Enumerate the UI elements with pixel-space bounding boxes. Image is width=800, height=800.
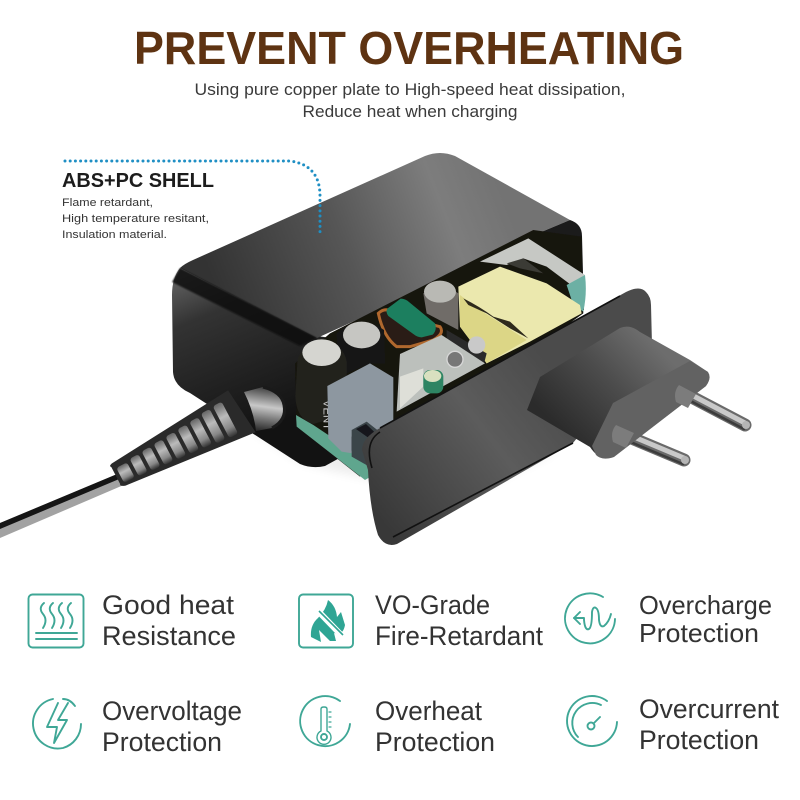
- capacitor 2: [337, 322, 385, 377]
- X capacitor block: [327, 363, 393, 453]
- feature: Good heat Resistance: Good heat: [102, 590, 235, 620]
- metal collar: [244, 387, 284, 431]
- front plate: [362, 288, 652, 545]
- title: PREVENT OVERHEATING: [134, 22, 684, 74]
- strain relief: [104, 388, 256, 499]
- feature: Overheat Protection: [300, 696, 495, 757]
- subtitle: Using pure copper plate to High-speed heat dissipation,: [194, 81, 626, 99]
- icon: crossed flame: [299, 594, 353, 648]
- callout: ABS+PC shell: ABS+PC SHELL: [62, 170, 214, 192]
- feature: Overcharge Protection: Overcharge: [639, 590, 772, 620]
- transistor: [447, 330, 487, 364]
- feature: Overheat Protection: Overheat: [375, 696, 482, 726]
- dark crease: [172, 268, 317, 346]
- circuit interior: [295, 230, 586, 480]
- callout dotted leader: [65, 161, 320, 232]
- PCB strip: [296, 415, 371, 480]
- feature: Good heat Resistance: Resistance: [102, 621, 236, 651]
- icon: heat waves: [28, 594, 84, 648]
- plug: [527, 327, 750, 464]
- plug face: [592, 361, 710, 459]
- heat sink top: [480, 238, 585, 287]
- capacitor 1: [295, 338, 347, 424]
- callout: ABS+PC shell: Insulation material.: [62, 229, 167, 241]
- interior back wall: [527, 220, 584, 320]
- feature: VO-Grade Fire-Retardant: VO-Grade: [375, 590, 490, 620]
- feature: Overvoltage Protection: Overvoltage: [102, 696, 242, 726]
- charger top surface: [180, 153, 570, 338]
- power cable: [0, 472, 126, 538]
- prong bases: [612, 385, 696, 448]
- callout: ABS+PC shell: [62, 170, 214, 241]
- copper coil: [378, 310, 441, 347]
- feature: Overvoltage Protection: Protection: [102, 727, 222, 757]
- charger product illustration: [0, 153, 750, 545]
- feature: Overcharge Protection: Protection: [639, 618, 759, 648]
- green capacitor: [387, 299, 436, 337]
- prong front: [621, 432, 684, 464]
- subtitle: Reduce heat when charging: [302, 103, 518, 121]
- callout: ABS+PC shell: High temperature resitant,: [62, 213, 209, 225]
- transformer: [458, 267, 582, 363]
- capacitor print: VENT: [320, 400, 332, 430]
- icon: thermometer: [300, 696, 350, 746]
- feature: Overcharge Protection: [565, 590, 772, 648]
- icon: lightning bolt: [33, 699, 81, 749]
- feature: Overcurrent Protection: Overcurrent: [639, 694, 779, 724]
- feature: Overcurrent Protection: Protection: [639, 725, 759, 755]
- feature: Overvoltage Protection: [33, 696, 242, 757]
- prong rear: [683, 391, 745, 429]
- callout: ABS+PC shell: Flame retardant,: [62, 197, 153, 209]
- icon: gauge: [567, 696, 617, 746]
- feature: VO-Grade Fire-Retardant: [299, 590, 543, 651]
- plug body: [527, 327, 708, 458]
- subtitle: [194, 81, 626, 121]
- rear capacitor: [423, 286, 458, 330]
- feature: Overcurrent Protection: [567, 694, 779, 755]
- feature: VO-Grade Fire-Retardant: Fire-Retardant: [375, 621, 543, 651]
- charger body front: [172, 268, 345, 467]
- small black component: [352, 422, 377, 467]
- interior base: [295, 230, 583, 477]
- ground shadow: [215, 405, 560, 535]
- feature: Good heat Resistance: [28, 590, 236, 651]
- icon: overcharge wave: [565, 593, 615, 643]
- feature: Overheat Protection: Protection: [375, 727, 495, 757]
- metal bracket: [397, 335, 485, 412]
